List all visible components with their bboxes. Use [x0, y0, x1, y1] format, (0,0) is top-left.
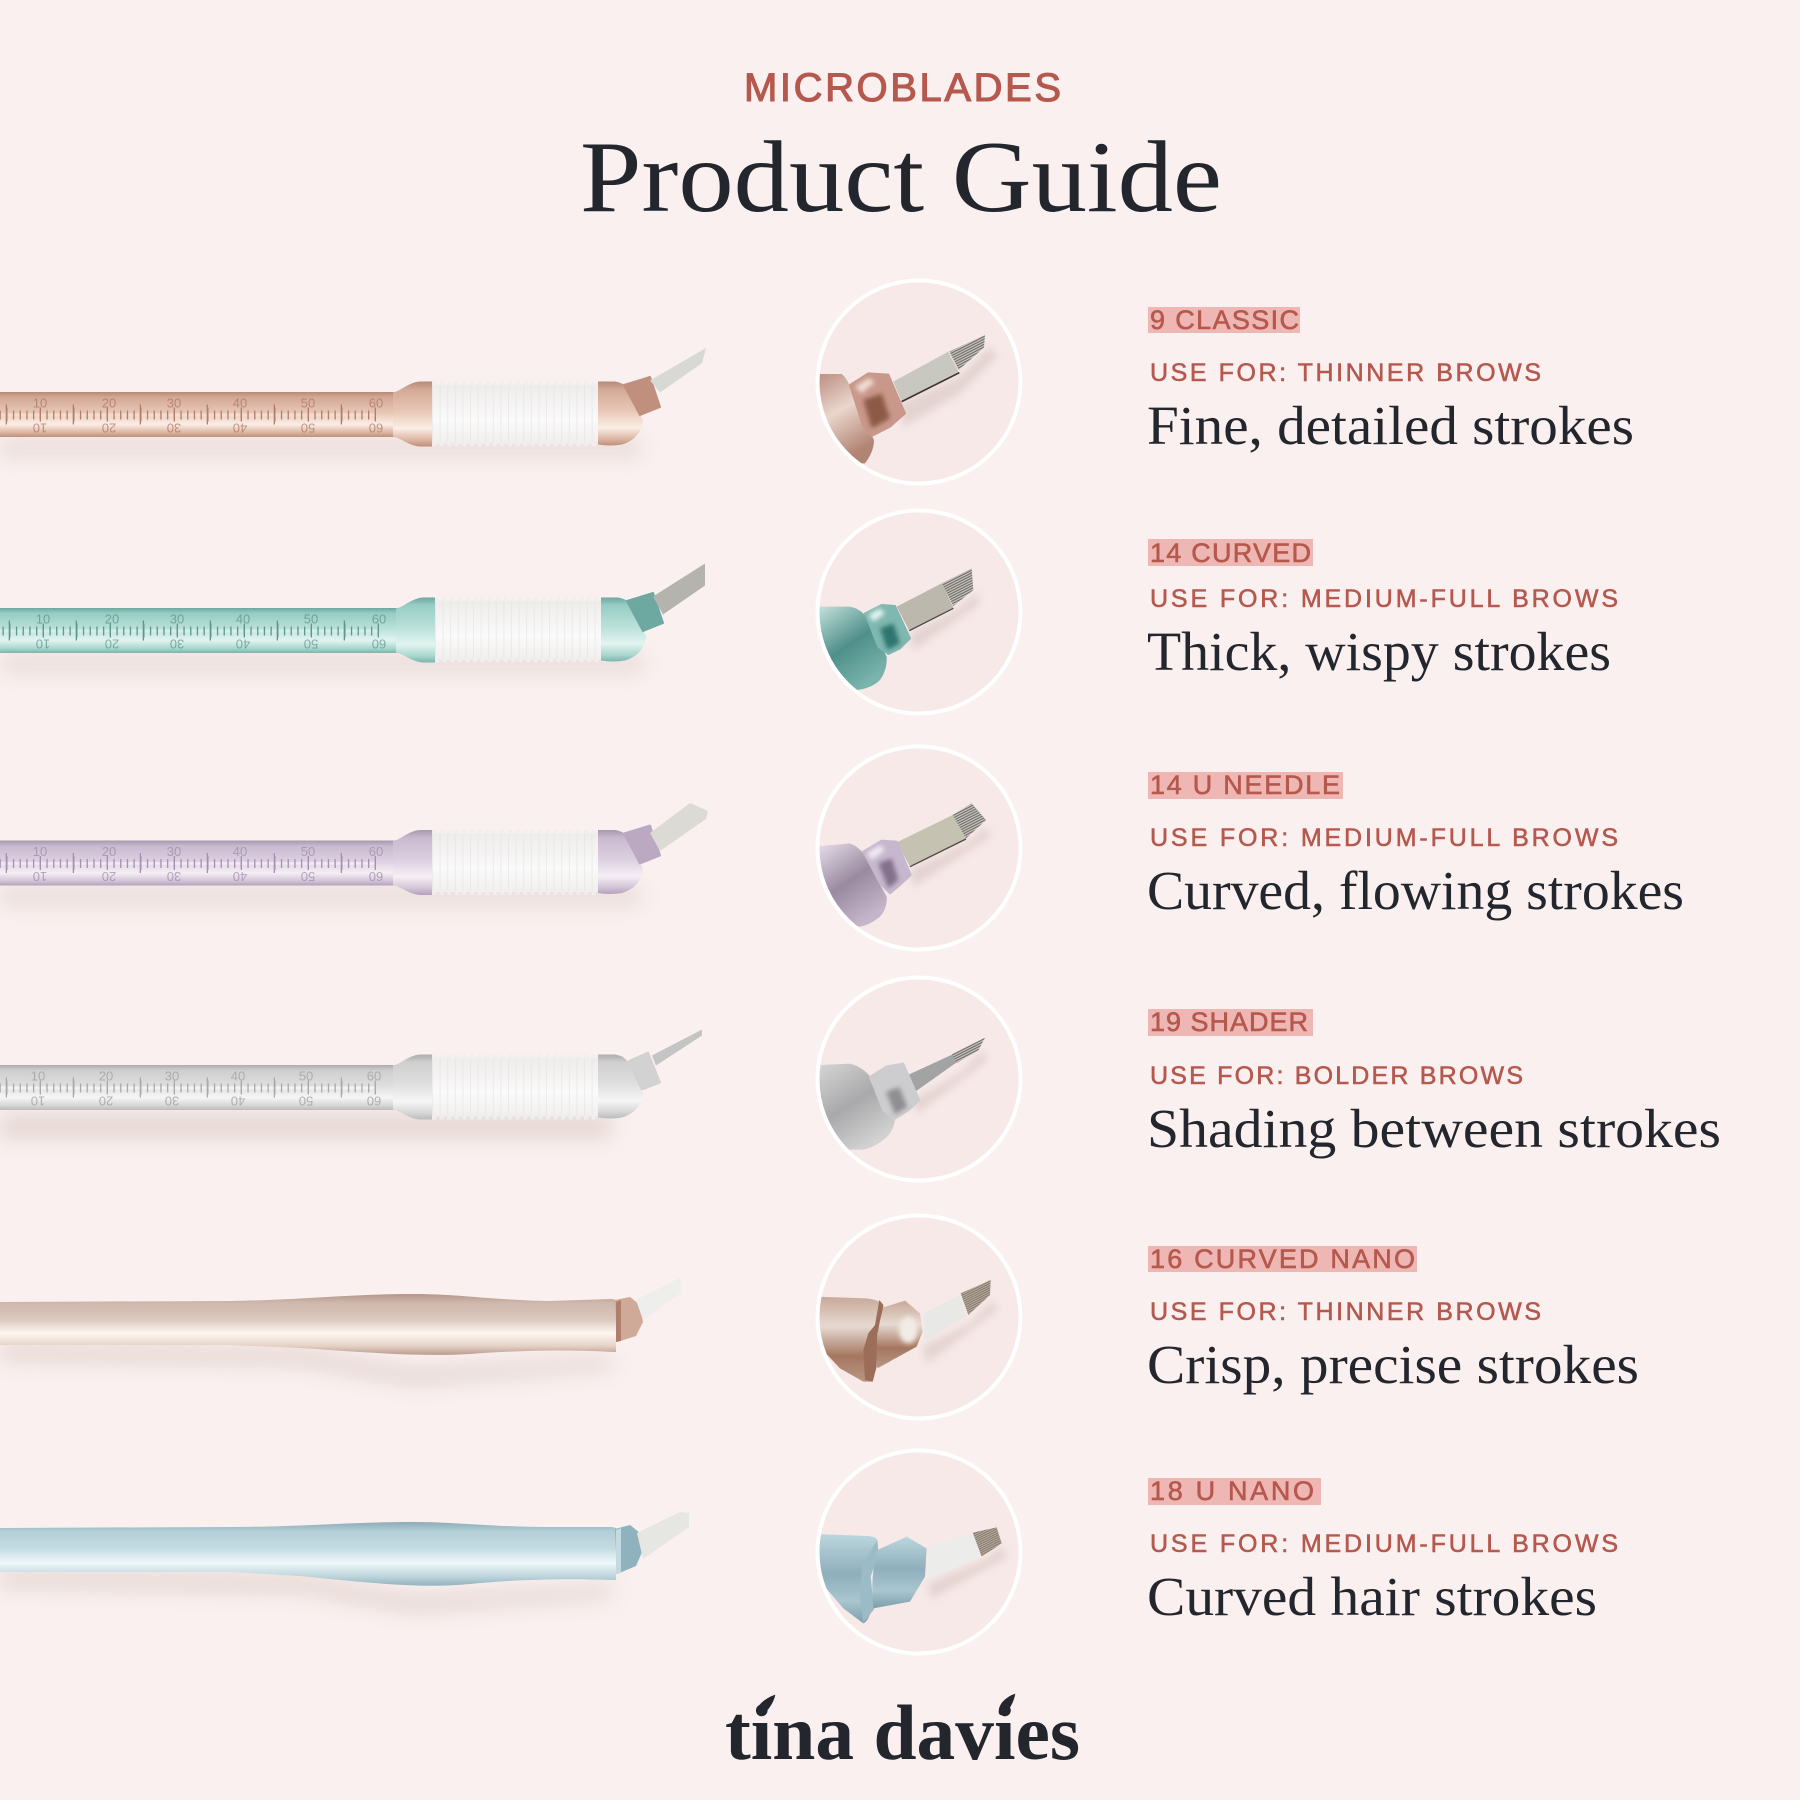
ruler numbers: 50	[301, 420, 315, 436]
ruler numbers: 20	[99, 1068, 113, 1084]
ruler numbers: 30	[165, 1094, 179, 1108]
ruler numbers: 60	[372, 636, 386, 652]
circle: 14 curved detail	[813, 509, 1022, 715]
handle body	[813, 1297, 883, 1382]
ruler numbers: 10	[31, 1068, 45, 1084]
ferrule	[850, 373, 905, 436]
handle body	[813, 1534, 877, 1623]
blade	[897, 583, 953, 631]
logo	[725, 1689, 1080, 1776]
ruler numbers: 60	[369, 869, 383, 884]
ruler numbers: 20	[102, 844, 116, 859]
ruler numbers: 60	[367, 1094, 381, 1108]
ruler numbers: 60	[372, 612, 386, 626]
ruler numbers: 50	[301, 844, 315, 859]
ruler numbers	[33, 844, 383, 884]
ruler numbers: 30	[167, 420, 181, 436]
needles	[942, 568, 973, 606]
title: Product Guide	[580, 121, 1222, 234]
ruler numbers: 60	[369, 420, 383, 436]
product name: 19 SHADER	[1150, 1007, 1308, 1037]
description: Crisp, precise strokes	[1147, 1334, 1639, 1395]
blade	[637, 1512, 689, 1559]
ruler numbers	[33, 396, 383, 436]
label highlight	[1148, 1478, 1321, 1505]
collar	[396, 598, 435, 662]
neck	[615, 1525, 643, 1574]
ruler numbers: 30	[167, 396, 181, 410]
ruler numbers: 40	[233, 396, 247, 410]
blade	[923, 1295, 967, 1340]
text block: 14 curved	[1147, 538, 1618, 682]
pen shadow	[0, 438, 640, 456]
pen: 9 classic rose	[0, 348, 706, 456]
white ribbed grip	[435, 600, 601, 660]
ferrule	[627, 593, 663, 631]
blade edge	[909, 608, 953, 631]
handle body	[813, 607, 887, 690]
use for line: USE FOR: THINNER BROWS	[1150, 359, 1541, 387]
barrel	[0, 840, 397, 886]
pen: 16 curved nano rose gold	[0, 1278, 681, 1384]
needles	[952, 1038, 985, 1063]
circle: 19 shader detail	[813, 976, 1022, 1182]
white ribbed grip	[432, 1056, 598, 1118]
eyebrow heading: MICROBLADES	[744, 66, 1061, 110]
pen shadow	[0, 1572, 612, 1611]
ferrule	[624, 377, 660, 415]
description: Thick, wispy strokes	[1147, 621, 1611, 682]
blade	[653, 564, 705, 614]
blade	[636, 1278, 681, 1320]
nose cone	[876, 1301, 923, 1368]
circle: 18 U nano detail	[813, 1449, 1022, 1655]
ruler numbers: 60	[369, 844, 383, 859]
pen shadow	[0, 887, 640, 905]
ruler numbers: 20	[102, 396, 116, 410]
ruler ticks	[0, 1086, 376, 1090]
ruler numbers: 30	[167, 844, 181, 859]
nose cone	[872, 1537, 927, 1608]
needle shaft	[652, 1030, 702, 1066]
ruler numbers: 10	[33, 844, 47, 859]
blade edge	[910, 839, 966, 867]
text block: 14 U needle	[1147, 770, 1684, 921]
blade edge	[902, 373, 959, 402]
ferrule highlight	[868, 608, 885, 622]
nano handle	[0, 1522, 616, 1586]
use for line: USE FOR: THINNER BROWS	[1150, 1298, 1541, 1326]
blade shadow	[928, 1547, 1007, 1598]
ferrule	[628, 1052, 660, 1090]
ferrule dark band	[880, 623, 900, 650]
ruler ticks	[0, 862, 376, 865]
ruler numbers: 10	[33, 869, 47, 884]
ferrule	[624, 826, 660, 864]
description: Fine, detailed strokes	[1147, 395, 1634, 456]
product name: 18 U NANO	[1150, 1476, 1314, 1506]
ruler numbers: 40	[233, 844, 247, 859]
ruler numbers: 30	[165, 1068, 179, 1084]
ruler numbers: 20	[105, 612, 119, 626]
product name: 14 CURVED	[1150, 538, 1311, 568]
blade	[893, 352, 958, 402]
ruler numbers: 40	[236, 612, 250, 626]
ruler numbers: 20	[99, 1094, 113, 1108]
ruler numbers: 20	[105, 636, 119, 652]
micro needle tip	[961, 1280, 991, 1315]
ruler numbers: 50	[299, 1068, 313, 1084]
logo brush accents	[757, 1694, 1015, 1715]
nose cone highlight	[899, 1317, 918, 1343]
ruler numbers	[36, 612, 386, 652]
needles	[953, 803, 986, 838]
circle: 16 curved nano detail	[813, 1214, 1022, 1420]
ruler numbers: 60	[367, 1068, 381, 1084]
barrel	[0, 608, 400, 653]
ruler numbers: 50	[304, 636, 318, 652]
use for line: USE FOR: MEDIUM-FULL BROWS	[1150, 585, 1618, 613]
ruler ticks	[0, 413, 376, 416]
ruler numbers: 50	[301, 869, 315, 884]
blade shadow	[910, 827, 990, 887]
ruler numbers: 10	[36, 612, 50, 626]
pen: 18 U nano blue	[0, 1512, 689, 1611]
circle: 14 U needle detail	[813, 745, 1022, 951]
ruler numbers: 10	[31, 1094, 45, 1108]
ruler numbers: 50	[299, 1094, 313, 1108]
blade shadow	[900, 347, 997, 427]
ruler numbers: 10	[33, 396, 47, 410]
ruler numbers: 10	[36, 636, 50, 652]
ferrule highlight	[855, 378, 875, 393]
ruler numbers: 60	[369, 396, 383, 410]
label highlight	[1148, 307, 1300, 333]
ruler numbers: 40	[233, 420, 247, 436]
ruler numbers	[31, 1068, 381, 1108]
ruler numbers: 30	[170, 636, 184, 652]
text block: 18 U nano	[1147, 1476, 1618, 1627]
micro needle tip	[973, 1527, 1002, 1557]
ferrule	[863, 841, 911, 893]
blade	[650, 348, 706, 392]
blade shadow	[910, 593, 980, 650]
ferrule	[865, 605, 910, 654]
ferrule dark band	[878, 858, 898, 888]
pen: 14 U needle lilac	[0, 803, 708, 905]
neck	[615, 1297, 643, 1342]
product name: 14 U NEEDLE	[1150, 770, 1340, 800]
use for line: USE FOR: MEDIUM-FULL BROWS	[1150, 824, 1618, 852]
description: Shading between strokes	[1147, 1098, 1721, 1159]
collar	[393, 382, 432, 446]
label highlight	[1148, 772, 1343, 799]
use for line: USE FOR: BOLDER BROWS	[1150, 1062, 1523, 1090]
ferrule dark band	[863, 393, 890, 428]
product name: 9 CLASSIC	[1150, 305, 1299, 335]
pen: 19 shader silver	[0, 1030, 702, 1138]
head	[601, 598, 646, 662]
barrel	[0, 1065, 397, 1110]
pen: 14 curved teal	[0, 564, 705, 672]
ruler numbers: 40	[231, 1068, 245, 1084]
ferrule	[870, 1064, 919, 1120]
pen shadow	[0, 1345, 612, 1384]
white ribbed grip	[432, 832, 598, 893]
ruler numbers: 20	[102, 420, 116, 436]
handle body	[813, 1064, 895, 1150]
blade	[650, 803, 708, 851]
circle: 9 classic detail	[813, 279, 1022, 485]
blade shadow	[913, 1050, 987, 1114]
use for line: USE FOR: MEDIUM-FULL BROWS	[1150, 1530, 1618, 1558]
label highlight	[1148, 1246, 1417, 1272]
pen shadow	[0, 1116, 610, 1138]
handle body	[813, 843, 887, 927]
needles	[949, 335, 985, 370]
head	[598, 830, 643, 894]
ruler numbers: 30	[167, 869, 181, 884]
handle body	[813, 374, 874, 463]
ruler numbers: 50	[301, 396, 315, 410]
ferrule dark band	[886, 1087, 907, 1114]
white ribbed grip	[432, 384, 598, 444]
text block: 9 classic	[1147, 305, 1634, 456]
neck ring	[616, 1300, 621, 1342]
ruler ticks	[0, 629, 379, 632]
logo wordmark: tina davies	[725, 1689, 1080, 1776]
nano handle	[0, 1294, 616, 1355]
handle ring	[863, 1300, 883, 1382]
neck ring	[616, 1528, 621, 1574]
blade	[927, 1533, 982, 1578]
head	[598, 382, 643, 446]
ruler numbers: 40	[236, 636, 250, 652]
barrel	[0, 392, 397, 437]
collar	[393, 1054, 432, 1120]
ruler numbers: 30	[170, 612, 184, 626]
pen shadow	[3, 654, 643, 672]
ferrule highlight	[867, 845, 885, 860]
collar	[393, 830, 432, 895]
ruler numbers: 40	[233, 869, 247, 884]
label highlight	[1148, 1009, 1313, 1036]
description: Curved, flowing strokes	[1147, 860, 1684, 921]
head	[598, 1054, 643, 1118]
ruler numbers: 40	[231, 1094, 245, 1108]
needle shaft	[909, 1054, 956, 1091]
blade shadow	[923, 1300, 997, 1363]
description: Curved hair strokes	[1147, 1566, 1597, 1627]
ruler numbers: 10	[33, 420, 47, 436]
handle ring	[859, 1540, 879, 1623]
ruler numbers: 50	[304, 612, 318, 626]
label highlight	[1148, 539, 1313, 566]
text block: 19 shader	[1147, 1007, 1721, 1159]
ruler numbers: 20	[102, 869, 116, 884]
blade	[897, 815, 966, 867]
product name: 16 CURVED NANO	[1150, 1244, 1415, 1274]
text block: 16 curved nano	[1147, 1244, 1639, 1395]
